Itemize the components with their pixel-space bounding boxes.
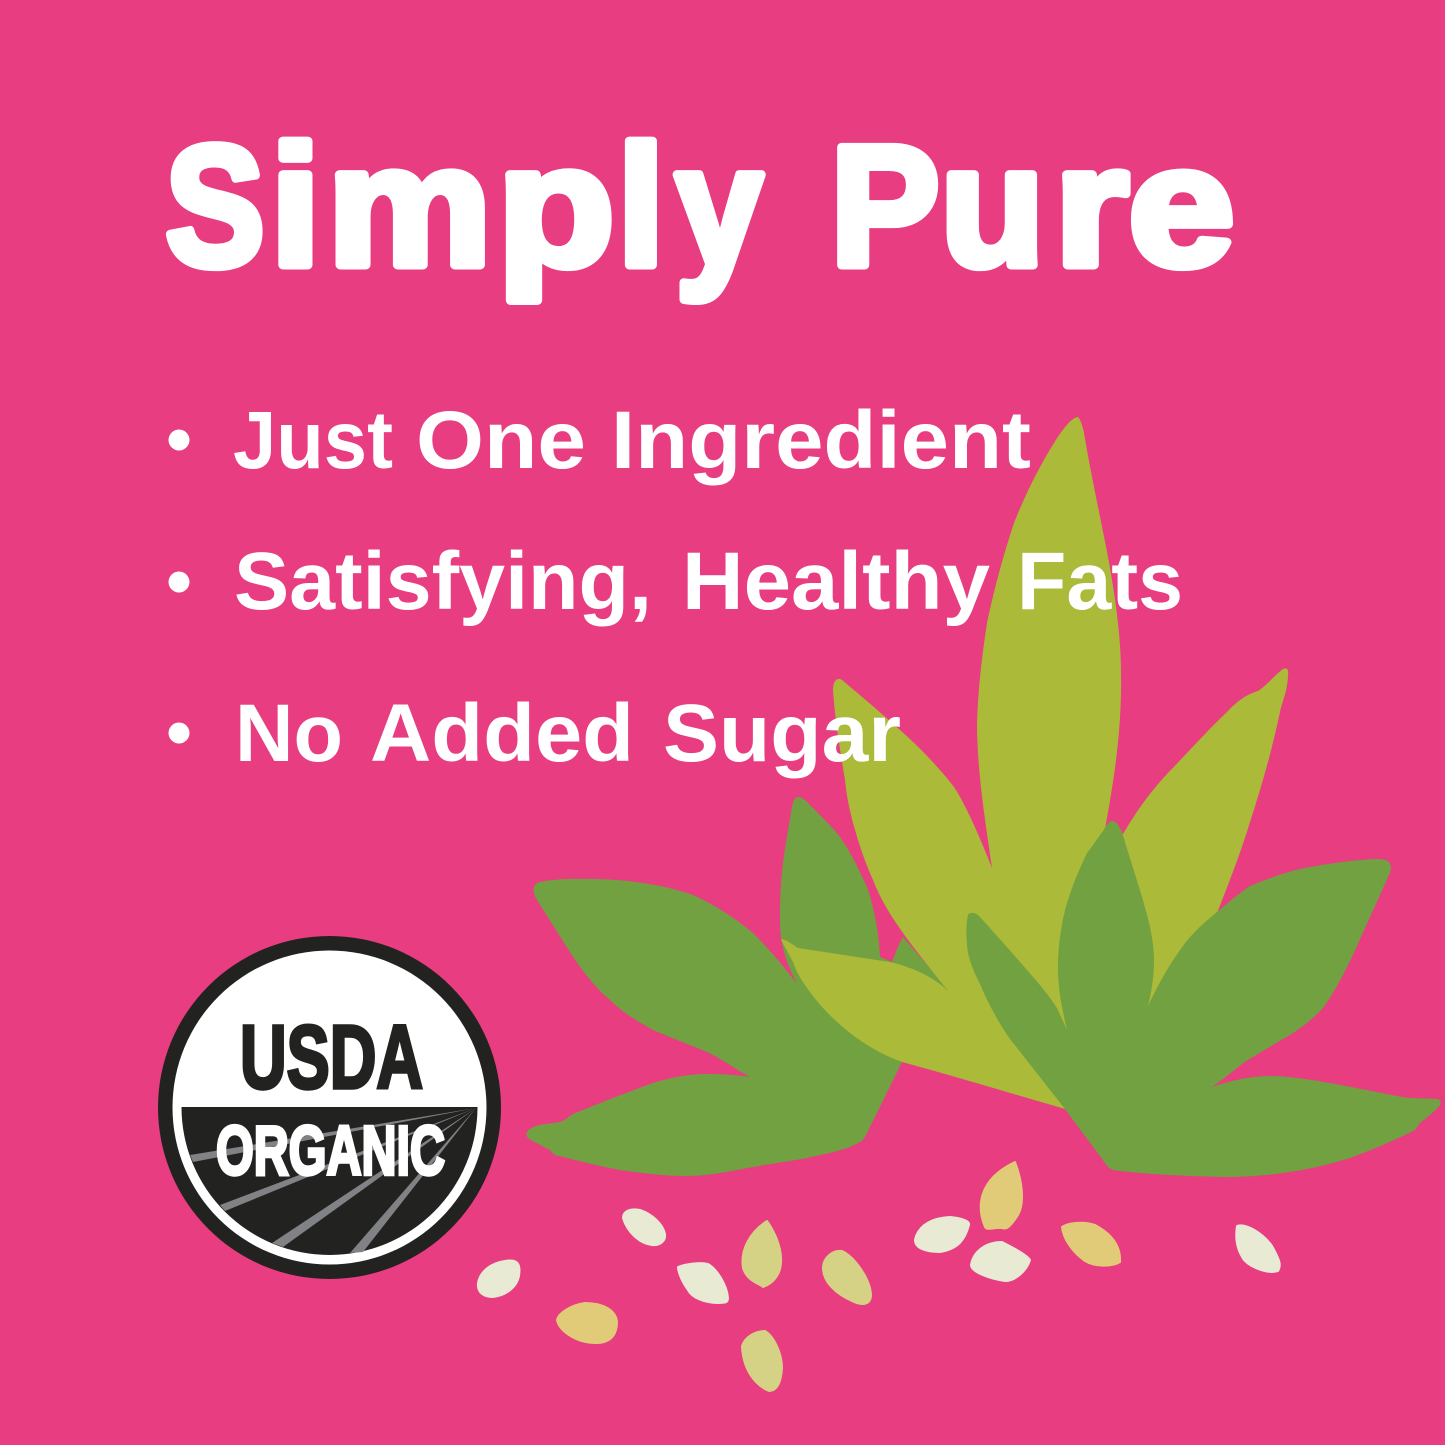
seed (742, 1221, 781, 1287)
bullet: just one ingredient: Just (233, 395, 393, 486)
leaf cluster: dark green right (966, 821, 1441, 1177)
bullet: no added sugar: Sugar (663, 688, 901, 779)
title: p (498, 111, 614, 302)
bullet: healthy fats: Healthy (682, 536, 990, 627)
bullet: just one ingredient: One (416, 395, 586, 486)
seed (981, 1162, 1022, 1229)
seed (823, 1251, 871, 1304)
title: e (1128, 111, 1234, 302)
title (166, 111, 1234, 302)
seed (971, 1242, 1030, 1281)
bullet: no added sugar: Added (370, 688, 634, 779)
title: P (830, 111, 940, 302)
seal word USDA: USDA (240, 1008, 423, 1108)
seed (557, 1303, 617, 1343)
illustration: hemp leaves (526, 417, 1441, 1177)
bullet: healthy fats: Fats (1017, 536, 1183, 627)
seed (478, 1261, 519, 1297)
bullet: no added sugar: No (235, 688, 343, 779)
bullet list (168, 395, 1183, 779)
bullet: just one ingredient (168, 395, 1031, 486)
leaf cluster: light green (781, 417, 1288, 1110)
seed (678, 1263, 728, 1303)
bullet: just one ingredient: Ingredient (611, 395, 1031, 486)
title: u (940, 111, 1044, 302)
bullet: healthy fats (168, 536, 1183, 627)
badge: USDA organic seal (158, 936, 501, 1279)
title: S (166, 111, 264, 302)
leaf cluster: dark green left (526, 797, 947, 1176)
title: i (270, 111, 320, 302)
bullet: no added sugar (168, 688, 901, 779)
title: m (328, 111, 492, 302)
seed (1062, 1223, 1120, 1266)
seeds scattered below the leaves (478, 1162, 1280, 1391)
seed (623, 1209, 665, 1245)
title: y (676, 111, 762, 302)
bullet: healthy fats: Satisfying, (234, 536, 652, 627)
title: r (1054, 111, 1128, 302)
seed (915, 1217, 969, 1252)
seal lower half field (182, 1107, 478, 1255)
seed (1236, 1225, 1280, 1272)
seal word ORGANIC: ORGANIC (216, 1112, 445, 1190)
title: l (618, 111, 664, 302)
seed (742, 1331, 782, 1391)
seal field rays (190, 1108, 476, 1253)
